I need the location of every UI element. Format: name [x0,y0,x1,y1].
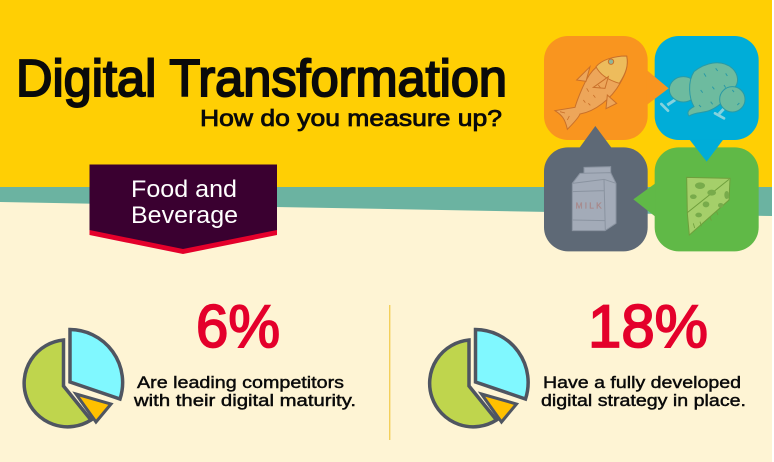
text: left stat description: Are leading competitors [137,373,344,392]
pie chart: right [430,330,528,427]
bubble pointers [579,70,723,217]
bubble backgrounds [544,36,759,251]
banner: Food and Beverage: Beverage [131,202,238,229]
icon: fish [555,56,627,129]
icon: milk carton [572,167,616,231]
icon group: food speech bubbles [544,36,759,251]
text: right stat description [541,373,746,410]
stat: 6%: 6% [196,293,280,360]
icon: cheese [687,177,730,235]
text: left stat description: with their digital maturity. [133,391,356,410]
title: Digital Transformation [16,50,507,108]
icon: turkey [661,63,745,118]
text: right stat description: digital strategy in place. [541,391,746,410]
icon: milk carton: MILK [576,201,602,211]
subtitle: How do you measure up? [200,105,502,131]
text: left stat description [133,373,356,410]
pie chart: left [24,330,123,427]
text: right stat description: Have a fully developed [543,373,741,392]
banner: Food and Beverage [90,164,277,254]
stat: 18%: 18% [588,293,708,360]
banner: Food and Beverage: Food and [131,176,237,203]
